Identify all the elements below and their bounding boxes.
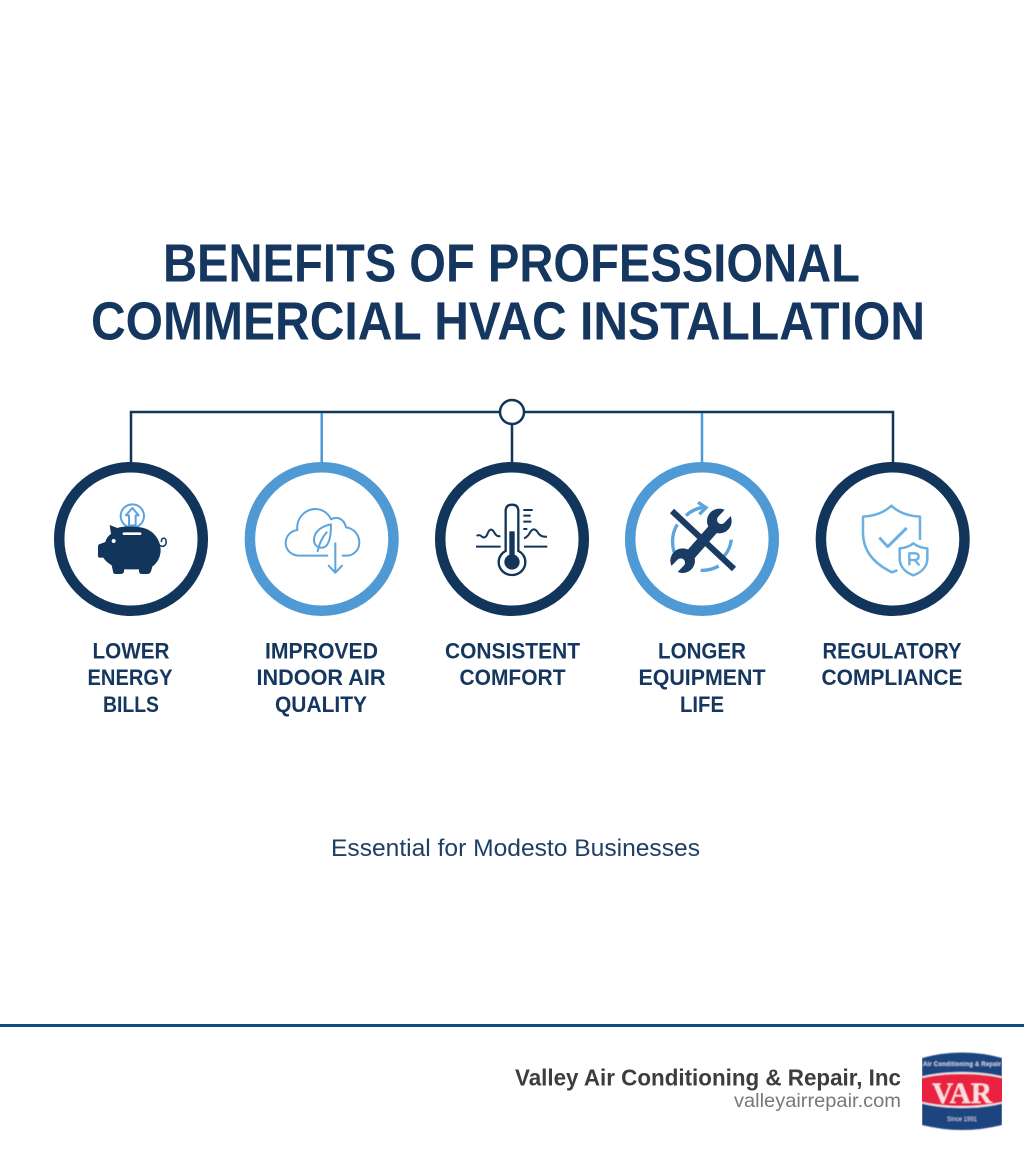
label: ENERGY [88, 665, 173, 690]
ring [630, 467, 774, 611]
logo: VAR [932, 1077, 992, 1110]
icon: cloud with leaf and arrow [286, 509, 359, 573]
logo: Since 1991 [947, 1117, 978, 1123]
title: BENEFITS OF PROFESSIONAL [163, 234, 860, 294]
icon: thermometer [476, 505, 547, 575]
label: EQUIPMENT [638, 665, 766, 690]
label: REGULATORY [822, 639, 962, 664]
ring [59, 467, 203, 611]
footer website: valleyairrepair.com [734, 1091, 901, 1112]
logo: Air Conditioning & Repair [923, 1062, 1002, 1068]
benefit: consistent comfort [440, 467, 584, 690]
label: LOWER [92, 639, 170, 664]
ring [440, 467, 584, 611]
benefit: lower energy bills [59, 467, 203, 717]
benefit: longer equipment life [630, 467, 774, 717]
label: COMFORT [460, 665, 566, 690]
label [88, 639, 173, 717]
label [445, 639, 581, 690]
label: LONGER [658, 639, 746, 664]
benefit: improved indoor air quality [250, 467, 394, 717]
icon: crossed wrench and bar with cycle arrow [670, 502, 734, 574]
subtitle: Essential for Modesto Businesses [331, 835, 700, 862]
label [256, 639, 386, 717]
label: INDOOR AIR [256, 665, 386, 690]
label: COMPLIANCE [822, 665, 962, 690]
benefit: regulatory compliance [821, 467, 964, 690]
icon: shield with check and R badge [863, 506, 927, 575]
label: IMPROVED [265, 639, 378, 664]
connector lines [131, 400, 893, 463]
ring [250, 467, 394, 611]
footer company name: Valley Air Conditioning & Repair, Inc [515, 1065, 901, 1091]
label: LIFE [680, 692, 724, 717]
footer divider [0, 1024, 1024, 1027]
label: CONSISTENT [445, 639, 581, 664]
label [822, 639, 962, 690]
label [638, 639, 766, 717]
title [91, 234, 925, 352]
label: BILLS [103, 692, 159, 717]
icon: piggy bank [98, 504, 166, 574]
ring [821, 467, 964, 611]
label: QUALITY [275, 692, 367, 717]
logo [922, 1052, 1002, 1131]
title: COMMERCIAL HVAC INSTALLATION [91, 292, 925, 352]
